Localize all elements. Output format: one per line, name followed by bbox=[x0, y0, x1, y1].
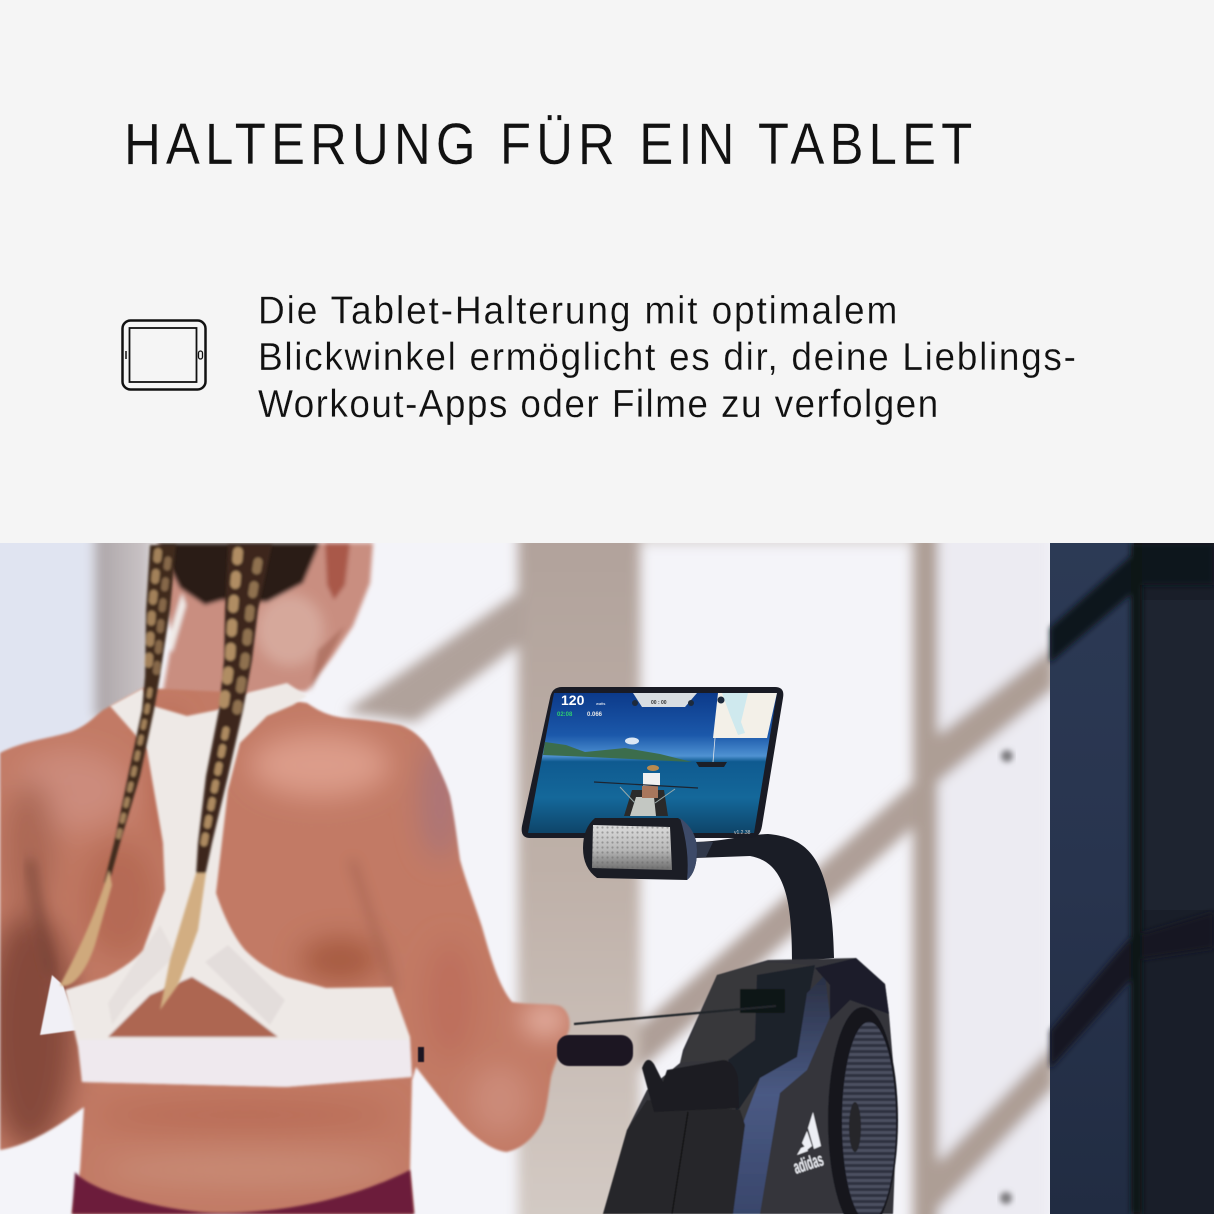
description text: Blickwinkel ermöglicht es dir, deine Lieblings- bbox=[258, 336, 1076, 379]
cloud bbox=[625, 738, 639, 744]
torso and arms bbox=[0, 680, 595, 1214]
adidas logo bbox=[793, 1112, 824, 1174]
gap between left arm and torso bbox=[40, 975, 78, 1035]
rower body bbox=[574, 958, 898, 1214]
tablet: 0.066 bbox=[587, 712, 603, 718]
dark column right bbox=[1050, 543, 1214, 1214]
power reading: 120 bbox=[561, 692, 585, 708]
cable slot bbox=[740, 989, 785, 1013]
machine arm bbox=[695, 834, 834, 962]
version tag: v1.2.38 bbox=[734, 830, 751, 836]
body upper dark section bbox=[756, 990, 757, 991]
tablet: watts bbox=[596, 701, 605, 706]
blue body stripe bbox=[733, 975, 830, 1214]
flywheel bbox=[828, 1007, 898, 1214]
handle cradle bbox=[642, 1060, 739, 1112]
sports bra bbox=[65, 683, 412, 1087]
icon: tablet bbox=[122, 320, 206, 390]
time panel bbox=[633, 693, 697, 707]
roller clamp bbox=[583, 818, 713, 880]
tablet screen bbox=[528, 693, 777, 833]
land bbox=[543, 742, 692, 762]
title: HALTERUNG FÜR EIN TABLET bbox=[124, 112, 972, 177]
description text bbox=[258, 290, 1076, 426]
wall shadows bbox=[0, 530, 1054, 1214]
tablet bbox=[522, 687, 783, 838]
rowing handle bbox=[418, 1035, 633, 1066]
tablet: 02:08 bbox=[557, 712, 573, 718]
woman bbox=[0, 543, 595, 1214]
description text: Die Tablet-Halterung mit optimalem bbox=[258, 290, 897, 333]
lower body bbox=[603, 1100, 745, 1214]
pants bbox=[72, 1170, 414, 1214]
adidas logo: adidas bbox=[791, 1149, 826, 1179]
photo: rowing machine with tablet holder bbox=[0, 530, 1214, 1214]
head and neck bbox=[157, 543, 373, 710]
left braid bbox=[60, 545, 176, 986]
cable bbox=[574, 1006, 776, 1024]
description text: Workout-Apps oder Filme zu verfolgen bbox=[258, 383, 938, 426]
map bbox=[713, 693, 777, 738]
boat bbox=[696, 762, 727, 767]
right braid bbox=[160, 545, 272, 1010]
tablet: 00 : 00 bbox=[651, 700, 667, 706]
wall bolts bbox=[1000, 750, 1013, 1204]
arm crease shadows bbox=[352, 860, 394, 990]
rower on screen bbox=[624, 790, 668, 816]
